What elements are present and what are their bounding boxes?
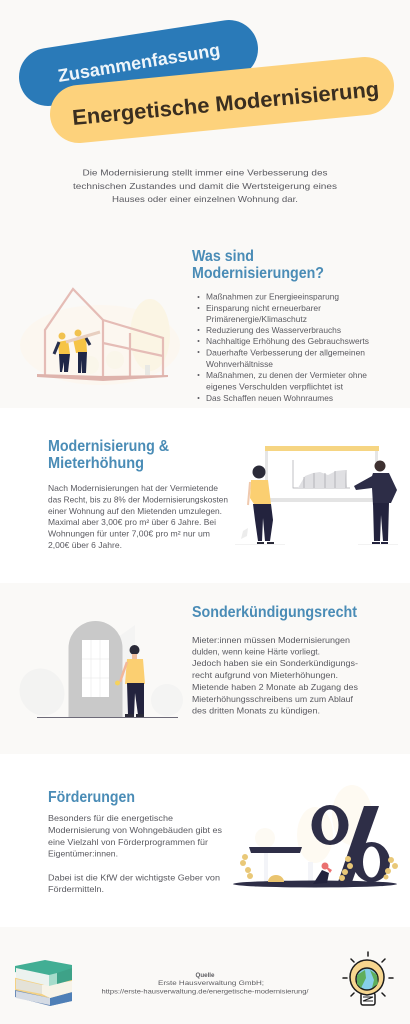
- text: funding: Besonders für die energetische: [48, 813, 173, 823]
- text: funding: Dabei ist die KfW der wichtigste Geber von: [48, 872, 220, 882]
- text: rent increase: 2,00€ über 6 Jahre.: [48, 540, 122, 550]
- intro text: Hauses oder einer einzelnen Wohnung dar.: [112, 194, 298, 204]
- source text: Erste Hausverwaltung GmbH;: [158, 980, 264, 987]
- text: rent increase: das Recht, bis zu 8% der Modernisierungskosten: [48, 494, 228, 504]
- text: special termination: recht aufgrund von Mieterhöhungen.: [192, 670, 338, 680]
- worker left: [54, 332, 70, 372]
- man: [354, 460, 398, 545]
- woman: [235, 466, 285, 545]
- heading: Sonderkündigungsrecht: Sonderkündigungsrecht: [192, 604, 357, 621]
- bullet list: Wohnverhältnisse: [206, 359, 273, 369]
- yellow pill: [79, 86, 365, 114]
- heading: Modernisierung & Mieterhöhung: Modernisierung &: [48, 438, 169, 455]
- heading: Modernisierung & Mieterhöhung: [48, 438, 169, 472]
- text: funding: eine Vielzahl von Förderprogrammen für: [48, 837, 208, 847]
- intro text: [73, 168, 337, 204]
- bullet list: Einsparung nicht erneuerbarer: [206, 303, 321, 313]
- text: rent increase: einer Wohnung auf den Mietenden umzulegen.: [48, 506, 222, 516]
- text: special termination: Jedoch haben sie ein Sonderkündigungs-: [192, 658, 358, 668]
- icon: stack of books: [15, 960, 72, 1006]
- subtitle: Zusammenfassung: [56, 40, 221, 86]
- seated woman: [313, 862, 332, 884]
- illustration: person at an arched door: [11, 621, 189, 724]
- heading: Was sind Modernisierungen?: Modernisierungen?: [192, 265, 324, 282]
- text: special termination: Mietende haben 2 Monate ab Zugang des: [192, 682, 358, 692]
- person: [115, 645, 145, 717]
- text: special termination: [192, 635, 358, 716]
- panel: funding background: [0, 754, 410, 927]
- heading: Modernisierung & Mieterhöhung: Mieterhöhung: [48, 455, 144, 472]
- bullet list: Dauerhafte Verbesserung der allgemeinen: [206, 348, 365, 358]
- worker right: [66, 330, 100, 373]
- plants: [240, 854, 398, 882]
- text: special termination: Mieter:innen müssen Modernisierungen: [192, 635, 350, 645]
- text: special termination: Mieterhöhungsschreibens um zum Ablauf: [192, 694, 354, 704]
- source text: https://erste-hausverwaltung.de/energetische-modernisierung/: [102, 988, 309, 996]
- illustration: minus percent sign: [233, 785, 398, 888]
- bullet list: Das Schaffen neuen Wohnraumes: [206, 393, 333, 403]
- illustration: two people at a chart board: [235, 446, 398, 545]
- bullet list: Primärenergie/Klimaschutz: [206, 314, 307, 324]
- text: rent increase: [48, 483, 228, 550]
- bullet list: Nachhaltige Erhöhung des Gebrauchswerts: [206, 336, 369, 346]
- text: rent increase: Wohnungen für unter 7,00€ pro m² nur um: [48, 528, 210, 538]
- ground: [233, 880, 397, 888]
- text: funding: Fördermitteln.: [48, 884, 104, 894]
- text: special termination: des dritten Monats zu kündigen.: [192, 706, 320, 716]
- illustration: workers building a house frame: [20, 289, 180, 385]
- bullet list: eigenes Verschulden verpflichtet ist: [206, 382, 344, 392]
- text: special termination: dulden, wenn keine Härte vorliegt.: [192, 646, 320, 656]
- text: rent increase: Nach Modernisierungen hat der Vermietende: [48, 483, 218, 493]
- bullet list: Reduzierung des Wasserverbrauchs: [206, 325, 341, 335]
- main title: Energetische Modernisierung: [71, 77, 380, 130]
- text: rent increase: Maximal aber 3,00€ pro m² über 6 Jahre. Bei: [48, 517, 216, 527]
- intro text: Die Modernisierung stellt immer eine Verbesserung des: [82, 168, 328, 178]
- text: funding: Eigentümer:innen.: [48, 848, 118, 858]
- heading: Was sind Modernisierungen?: [192, 248, 324, 282]
- text: funding: [48, 813, 222, 894]
- bullet list: [198, 292, 369, 403]
- minus: [249, 847, 302, 853]
- intro text: technischen Zustandes und damit die Wertsteigerung eines: [73, 181, 337, 191]
- board: [265, 446, 379, 502]
- bullet list: Maßnahmen zur Energieeinsparung: [206, 292, 339, 302]
- percent: [312, 805, 348, 845]
- source text: [102, 972, 309, 996]
- heading: Was sind Modernisierungen?: Was sind: [192, 248, 254, 265]
- title banner: [48, 40, 380, 130]
- heading: Förderungen: Förderungen: [48, 789, 135, 806]
- bullet list: Maßnahmen, zu denen der Vermieter ohne: [206, 370, 367, 380]
- blue pill: [48, 49, 229, 77]
- text: funding: Modernisierung von Wohngebäuden gibt es: [48, 825, 222, 835]
- icon: light bulb with globe: [343, 952, 393, 1005]
- panel: rent increase background: [0, 408, 410, 583]
- source text: Quelle: [196, 972, 215, 979]
